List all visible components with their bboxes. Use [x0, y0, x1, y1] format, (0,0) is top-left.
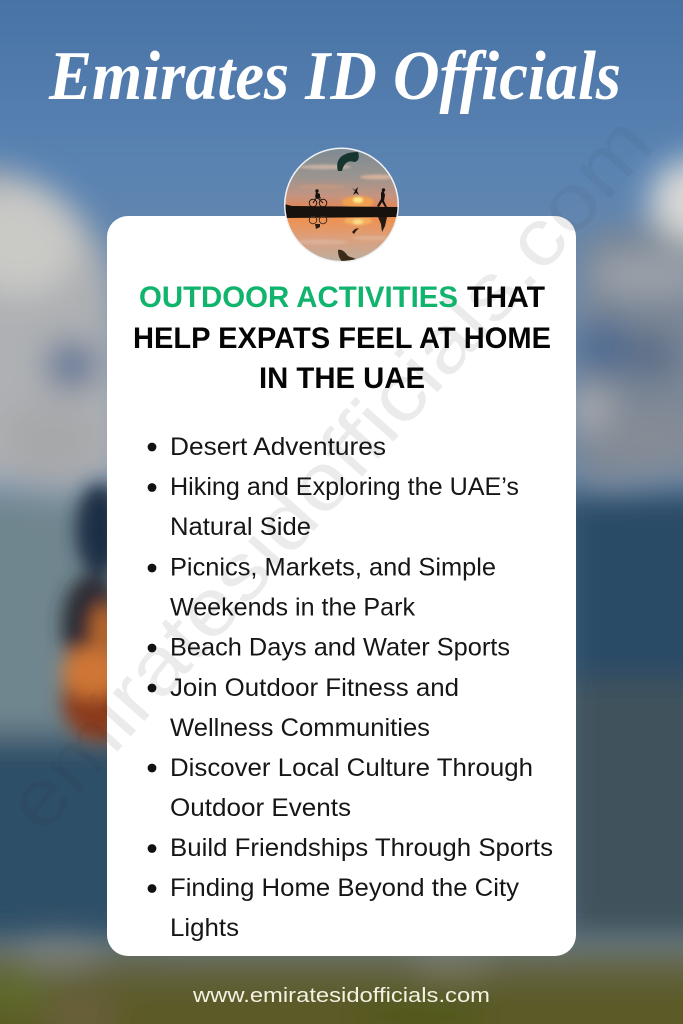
icon: circular sunset photo with cyclist, runner and paraglider: [284, 148, 400, 263]
skydiver: [352, 187, 359, 195]
heading: IN THE UAE: [259, 362, 425, 395]
activities bullet list: Picnics, Markets, and Simple: [170, 554, 496, 582]
paraglider: [337, 152, 359, 171]
activities bullet list: Beach Days and Water Sports: [170, 634, 510, 662]
activities bullet list: Wellness Communities: [170, 714, 430, 742]
skydiver reflection: [352, 228, 359, 234]
runner: [377, 191, 387, 207]
activities bullet list: Desert Adventures: [170, 433, 386, 461]
heading: THAT: [467, 281, 545, 314]
activities bullet list: [148, 433, 553, 942]
watermark on background: emiratesidofficials.com: [0, 98, 669, 847]
runner reflection: [378, 217, 387, 232]
card panel: [107, 216, 576, 956]
activities bullet list: Hiking and Exploring the UAE’s: [170, 473, 519, 501]
cyclist: [309, 189, 327, 207]
heading: OUTDOOR ACTIVITIES: [139, 281, 458, 314]
paraglider reflection: [338, 250, 356, 261]
activities bullet list: Finding Home Beyond the City: [170, 874, 520, 902]
heading: [133, 281, 551, 395]
activities bullet list: Join Outdoor Fitness and: [170, 674, 459, 702]
activities bullet list: Discover Local Culture Through: [170, 754, 533, 782]
activities bullet list: Lights: [170, 914, 239, 942]
watermark on card: emiratesidofficials.com: [0, 98, 669, 847]
website footer: www.emiratesidofficials.com: [192, 984, 490, 1007]
activities bullet list: Natural Side: [170, 513, 311, 541]
activities bullet list: Build Friendships Through Sports: [170, 834, 553, 862]
cyclist reflection: [309, 216, 327, 229]
heading: HELP EXPATS FEEL AT HOME: [133, 322, 551, 355]
activities bullet list: Outdoor Events: [170, 794, 351, 822]
activities bullet list: Weekends in the Park: [170, 594, 415, 622]
brand title: Emirates ID Officials: [48, 38, 621, 115]
